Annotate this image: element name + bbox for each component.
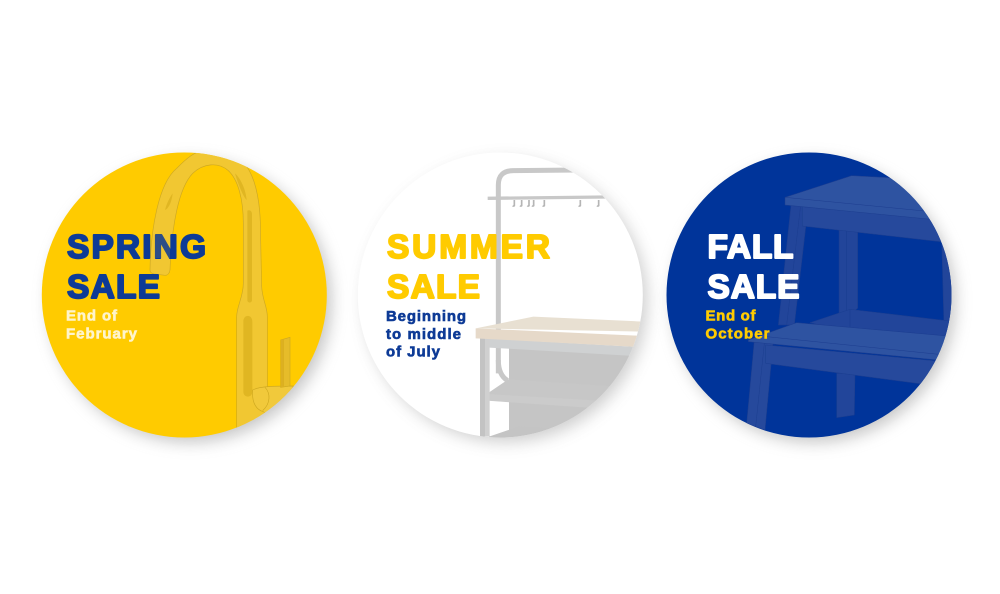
spring heading: SALE	[67, 269, 160, 306]
summer dates	[386, 308, 466, 360]
stool step recess	[810, 309, 948, 336]
spring heading: SPRING	[67, 229, 206, 266]
spring dates: February	[66, 326, 138, 343]
faucet overlap tint	[153, 231, 170, 258]
stool front upper leg	[778, 205, 808, 325]
faucet highlights	[165, 173, 252, 397]
stool upper rail	[802, 207, 942, 242]
island frame pole	[498, 170, 578, 373]
hanging rail	[488, 197, 605, 198]
table top	[476, 317, 645, 332]
back panels	[509, 348, 629, 430]
summer dates: Beginning	[386, 308, 466, 325]
spring heading	[67, 229, 206, 306]
apron	[490, 339, 633, 356]
summer badge circle	[358, 152, 643, 438]
faucet handle	[281, 337, 290, 387]
fall dates: End of	[706, 307, 756, 324]
legs	[480, 338, 485, 437]
stool top	[784, 176, 930, 220]
spring badge circle	[42, 152, 327, 438]
faucet base	[253, 386, 293, 417]
fall heading: FALL	[708, 229, 794, 266]
illustration: kitchen faucet	[150, 150, 293, 430]
panel: spring sale	[42, 150, 331, 442]
spring dates: End of	[66, 307, 118, 324]
summer dates: of July	[386, 344, 441, 360]
spring dates	[66, 307, 138, 343]
stool front lower leg	[747, 340, 773, 430]
summer dates: to middle	[386, 326, 461, 343]
illustration: step stool	[747, 176, 955, 430]
stool back legs	[839, 230, 858, 322]
summer heading: SALE	[387, 269, 480, 306]
shelf	[490, 379, 509, 396]
fall heading: SALE	[708, 269, 800, 306]
fall dates: October	[706, 326, 770, 343]
summer heading: SUMMER	[387, 229, 550, 266]
hooks	[513, 200, 599, 206]
summer heading	[387, 229, 550, 306]
panel: summer sale	[358, 152, 647, 442]
panel: fall sale	[666, 152, 955, 442]
fall badge circle	[666, 152, 952, 438]
stool step	[748, 323, 955, 362]
stool lower rail	[766, 345, 936, 384]
illustration: kitchen island	[476, 170, 645, 440]
fall dates	[706, 307, 770, 343]
fall heading	[708, 229, 800, 306]
